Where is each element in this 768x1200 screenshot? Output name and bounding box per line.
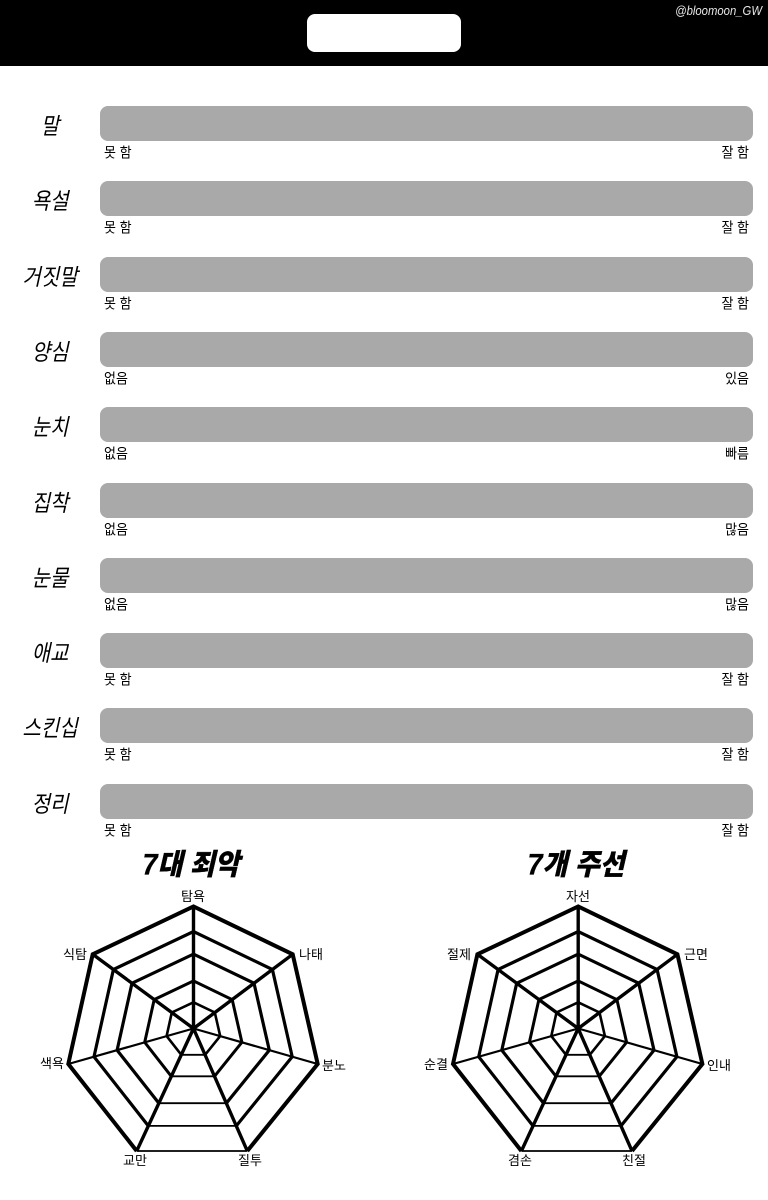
radar chart: 7개 주선 [453,906,702,1151]
blank title box [307,14,461,52]
row: 눈물 [32,558,753,613]
row: 욕설 [32,181,753,236]
row: 눈치: 눈치 [32,415,68,441]
row: 욕설: 못 함 [104,219,132,236]
axis labels: 7대 죄악: 분노 [322,1058,346,1073]
row: 거짓말 [22,257,753,312]
row: 말: 말 [41,114,59,140]
watermark credit: @bloomoon_GW [675,3,762,18]
row: 스킨십: 스킨십 [22,716,78,742]
row: 집착: 집착 [32,491,68,517]
row: 정리: 잘 함 [721,822,749,839]
row: 욕설: 욕설 [32,189,68,215]
row: 눈물: 없음 [104,596,128,613]
row: 양심: 있음 [725,370,749,387]
axis labels: 7개 주선: 친절 [622,1153,646,1168]
row: 애교: 못 함 [104,671,132,688]
row: 집착: 많음 [725,521,749,538]
axis labels: 7대 죄악: 나태 [299,947,323,962]
row: 양심: 없음 [104,370,128,387]
row: 집착: 없음 [104,521,128,538]
axis labels: 7대 죄악: 식탐 [63,947,87,962]
axis labels: 7개 주선: 근면 [684,947,708,962]
axis labels: 7개 주선: 인내 [707,1058,731,1073]
axis labels: 7개 주선 [424,889,731,1168]
row: 정리 [32,784,753,839]
row: 거짓말: 못 함 [104,295,132,312]
axis labels: 7개 주선: 겸손 [508,1153,532,1168]
radar chart: 7대 죄악 [68,906,318,1151]
row: 양심 [32,332,753,387]
row: 거짓말: 거짓말 [22,265,78,291]
row: 눈치: 없음 [104,445,128,462]
row: 욕설: 잘 함 [721,219,749,236]
row: 눈물: 많음 [725,596,749,613]
axis labels: 7대 죄악: 질투 [238,1153,262,1168]
row: 거짓말: 잘 함 [721,295,749,312]
row: 애교: 애교 [32,641,68,667]
axis labels: 7대 죄악: 탐욕 [181,889,205,904]
row: 양심: 양심 [32,340,68,366]
row: 애교: 잘 함 [721,671,749,688]
row: 애교 [32,633,753,688]
row: 스킨십: 못 함 [104,746,132,763]
row: 스킨십 [22,708,753,763]
row: 정리: 못 함 [104,822,132,839]
axis labels: 7개 주선: 자선 [566,889,590,904]
row: 눈물: 눈물 [32,566,68,592]
row: 눈치: 빠름 [725,445,749,462]
row: 스킨십: 잘 함 [721,746,749,763]
heading: 7개 주선: 7개 주선 [527,849,625,881]
row: 집착 [32,483,753,538]
axis labels: 7대 죄악: 색욕 [40,1056,64,1071]
heading: 7대 죄악: 7대 죄악 [142,849,240,881]
row: 말 [41,106,753,161]
axis labels: 7개 주선: 순결 [424,1057,448,1072]
row: 눈치 [32,407,753,462]
row: 말: 못 함 [104,144,132,161]
row: 말: 잘 함 [721,144,749,161]
row: 정리: 정리 [32,792,68,818]
axis labels: 7대 죄악: 교만 [123,1153,147,1168]
header band [0,0,768,66]
axis labels: 7개 주선: 절제 [447,947,471,962]
axis labels: 7대 죄악 [40,889,346,1168]
